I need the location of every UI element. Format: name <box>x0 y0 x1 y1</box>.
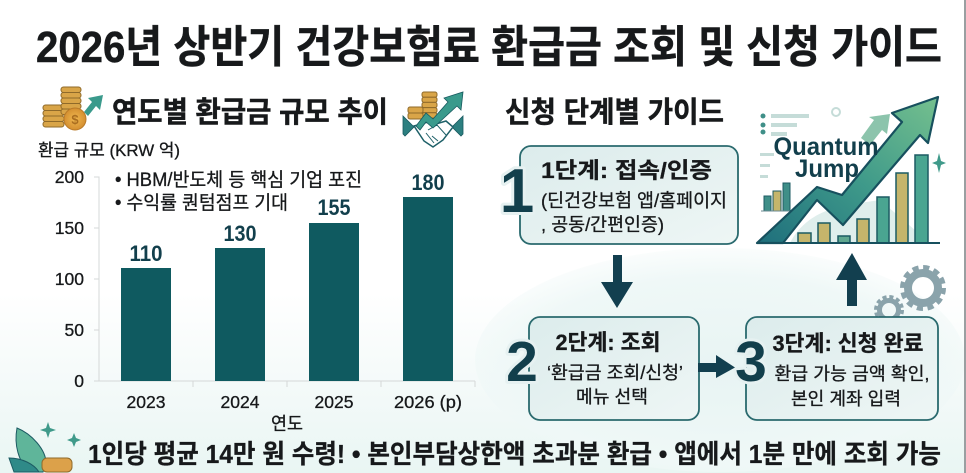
step 3 text: 3단계: 신청 완료 <box>772 331 924 356</box>
soft backdrop <box>790 200 930 243</box>
illustration: quantum jump chart <box>757 97 946 243</box>
step 2 text <box>547 330 683 407</box>
arrow: step 2 to step 3 <box>698 355 735 378</box>
bar values: 155 <box>318 195 350 220</box>
callout: investment notes: • HBM/반도체 등 핵심 기업 포진 <box>115 169 362 191</box>
icon: leaves and coins <box>9 422 81 472</box>
quantum jump label: Jump <box>795 155 859 183</box>
rising bars <box>798 155 928 243</box>
sparkles <box>932 153 946 173</box>
step 3 text: 본인 계좌 입력 <box>791 389 901 409</box>
quantum jump label <box>774 133 878 183</box>
arrow: step 1 to step 2 <box>601 255 633 308</box>
heading: yearly refund trend: 연도별 환급금 규모 추이 <box>112 96 388 129</box>
step 2 text: 메뉴 선택 <box>576 387 648 407</box>
callout: investment notes: • 수익률 퀀텀점프 기대 <box>115 192 288 214</box>
step 1 text <box>541 158 727 235</box>
x axis years: 2026 (p) <box>394 392 462 412</box>
step 3 box <box>735 317 938 420</box>
icon: gears <box>876 268 943 323</box>
bar values: 110 <box>130 241 162 266</box>
step 1 text: 1단계: 접속/인증 <box>541 158 712 183</box>
bar values: 180 <box>412 170 444 195</box>
step 2 text: ‘환급금 조회/신청’ <box>547 363 683 383</box>
step 2 text: 2단계: 조회 <box>556 330 660 355</box>
big arrow <box>757 97 938 243</box>
y axis label: 환급 규모 (KRW 억) <box>38 141 180 160</box>
x axis years: 2025 <box>315 392 353 412</box>
step 3 text <box>772 331 930 409</box>
quantum jump label: Quantum <box>774 133 878 161</box>
step 1 text: , 공동/간편인증) <box>541 214 664 235</box>
panel: refund trend chart <box>38 87 475 434</box>
y axis ticks <box>55 167 84 391</box>
heading: step guide: 신청 단계별 가이드 <box>505 96 724 129</box>
step 2 box <box>506 317 699 420</box>
soft decorations <box>760 114 809 178</box>
bar values <box>130 170 444 266</box>
step 1 box <box>500 146 738 244</box>
x axis years <box>127 392 462 412</box>
arrow: step 3 to quantum jump <box>836 253 867 306</box>
x axis years: 2024 <box>221 392 260 412</box>
icon: coins with arrow: $ <box>71 112 79 127</box>
bar values: 130 <box>224 221 256 246</box>
bars <box>121 197 453 381</box>
step 1 text: (딘건강보험 앱/홈페이지 <box>541 190 727 211</box>
step 1 number: 1 <box>500 157 534 226</box>
y axis ticks: 200 <box>55 167 84 187</box>
callout: investment notes <box>115 169 362 214</box>
y axis ticks: 50 <box>65 320 84 340</box>
panel: application guide <box>500 96 946 420</box>
step 3 number: 3 <box>735 330 767 394</box>
step 3 text: 환급 가능 금액 확인, <box>774 364 930 384</box>
icon: coins and handshake <box>403 92 463 147</box>
footer summary: 1인당 평균 14만 원 수령! • 본인부담상한액 초과분 환급 • 앱에서 1분 만에 조회 가능 <box>88 439 941 469</box>
axes <box>94 177 475 387</box>
y axis ticks: 0 <box>74 371 84 391</box>
x axis years: 2023 <box>127 392 165 412</box>
small left bars <box>764 183 790 211</box>
x axis title: 연도 <box>271 414 303 434</box>
step 2 number: 2 <box>506 330 538 394</box>
y axis ticks: 100 <box>55 269 84 289</box>
icon: coins with arrow <box>43 87 103 130</box>
y axis ticks: 150 <box>55 218 84 238</box>
